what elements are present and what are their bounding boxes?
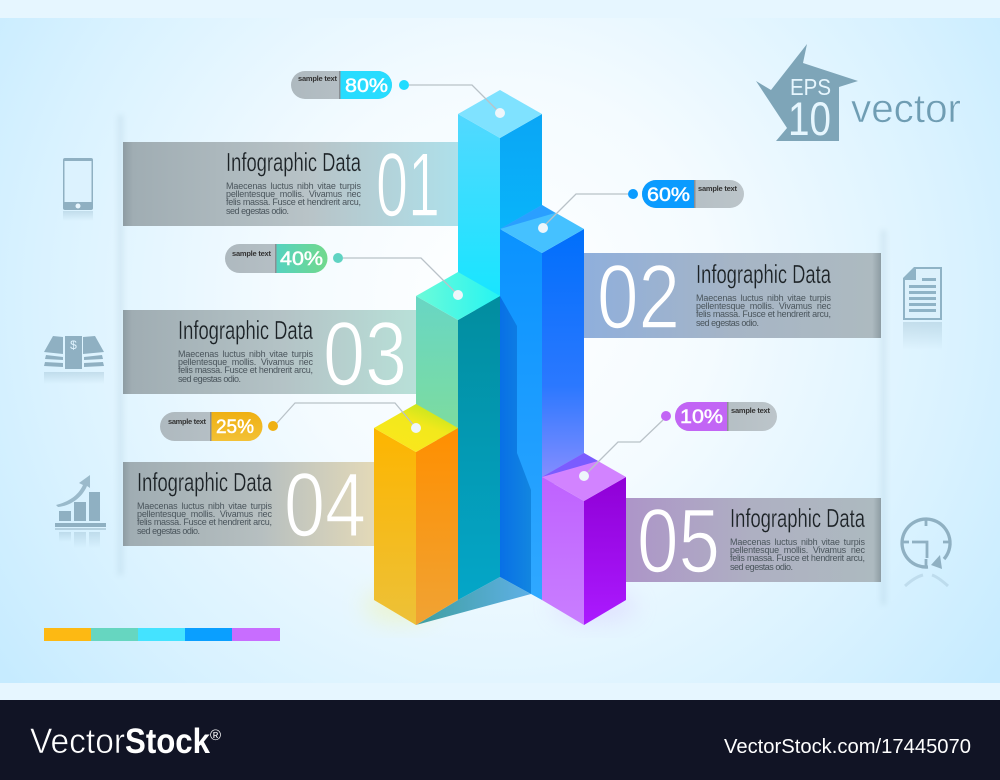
text block 03: pellentesque mollis. Vivamus nec: [178, 357, 314, 367]
text block 01: pellentesque mollis. Vivamus nec: [226, 189, 362, 199]
callout 80%: [291, 71, 505, 118]
footer logo: ®: [210, 727, 221, 744]
footer logo: Stock: [125, 722, 210, 761]
footer: [0, 700, 1000, 780]
text block 04: sed egestas odio.: [137, 526, 200, 536]
footer logo: [30, 722, 221, 761]
footer id: VectorStock.com/17445070: [724, 736, 971, 758]
bar 5 purple: [542, 453, 626, 625]
callout 25%: [160, 403, 421, 441]
callout 80%: sample text: [298, 74, 338, 83]
logo: EPS 10: EPS: [790, 74, 831, 100]
text block 01: felis massa. Fusce et hendrerit arcu,: [226, 197, 361, 207]
bar 2 blue: [500, 205, 584, 600]
logo: EPS 10: [756, 44, 858, 145]
callout 25%: 25%: [216, 417, 254, 438]
banner 02: [584, 247, 881, 348]
text block 05: [730, 537, 866, 572]
text block 02: felis massa. Fusce et hendrerit arcu,: [696, 309, 831, 319]
text block 05: Maecenas luctus nibh vitae turpis: [730, 537, 866, 547]
callout 10%: [579, 402, 777, 481]
bar 4 orange: [374, 404, 458, 625]
text block 02: pellentesque mollis. Vivamus nec: [696, 301, 832, 311]
bar chart: [364, 90, 637, 625]
bar 3 teal: [416, 272, 500, 600]
vector label: vector: [851, 87, 961, 131]
callout 40%: [225, 244, 463, 300]
footer logo: Vector: [30, 722, 125, 761]
icon: phone: [63, 158, 93, 221]
callout 40%: sample text: [232, 249, 272, 258]
callout 60%: sample text: [698, 184, 738, 193]
text block 01: [226, 181, 362, 216]
banner 03: [123, 304, 416, 405]
icon: growth chart: [55, 475, 106, 548]
text block 02: Maecenas luctus nibh vitae turpis: [696, 293, 832, 303]
heading 01: Infographic Data: [226, 147, 361, 177]
banner 01: [123, 135, 458, 236]
text block 05: felis massa. Fusce et hendrerit arcu,: [730, 553, 865, 563]
text block 01: Maecenas luctus nibh vitae turpis: [226, 181, 362, 191]
icon: money: $: [70, 338, 77, 352]
heading 03: Infographic Data: [178, 315, 313, 345]
text block 03: felis massa. Fusce et hendrerit arcu,: [178, 365, 313, 375]
callout 80%: 80%: [345, 76, 388, 97]
number 04: 04: [284, 455, 366, 556]
heading 02: Infographic Data: [696, 259, 831, 289]
text block 05: sed egestas odio.: [730, 562, 793, 572]
number 01: 01: [376, 135, 440, 236]
heading 05: Infographic Data: [730, 503, 865, 533]
text block 05: pellentesque mollis. Vivamus nec: [730, 545, 866, 555]
banner 04: [123, 455, 374, 556]
callout 60%: [538, 180, 744, 233]
bar 1 cyan: [458, 90, 542, 310]
text block 04: [137, 501, 272, 536]
callout 10%: 10%: [680, 407, 723, 428]
callout 10%: sample text: [731, 406, 770, 415]
text block 01: sed egestas odio.: [226, 206, 289, 216]
text block 04: Maecenas luctus nibh vitae turpis: [137, 501, 272, 511]
number 02: 02: [597, 247, 680, 348]
text block 03: Maecenas luctus nibh vitae turpis: [178, 349, 314, 359]
heading 04: Infographic Data: [137, 467, 272, 497]
floor shadow: [416, 577, 531, 625]
logo: EPS 10: 10: [788, 92, 831, 145]
callout 25%: sample text: [168, 417, 206, 426]
number 03: 03: [323, 304, 407, 405]
text block 02: [696, 293, 832, 328]
text block 03: sed egestas odio.: [178, 374, 241, 384]
callout 60%: 60%: [647, 185, 690, 206]
icon: clock: [902, 519, 950, 586]
text block 04: felis massa. Fusce et hendrerit arcu,: [137, 517, 272, 527]
icon: money: [44, 336, 104, 384]
number 05: 05: [637, 491, 720, 592]
text block 02: sed egestas odio.: [696, 318, 759, 328]
colour legend bar: [44, 628, 280, 641]
text block 03: [178, 349, 314, 384]
icon: document: [903, 267, 942, 350]
callout 40%: 40%: [280, 249, 323, 270]
banner 05: [626, 491, 881, 592]
text block 04: pellentesque mollis. Vivamus nec: [137, 509, 272, 519]
